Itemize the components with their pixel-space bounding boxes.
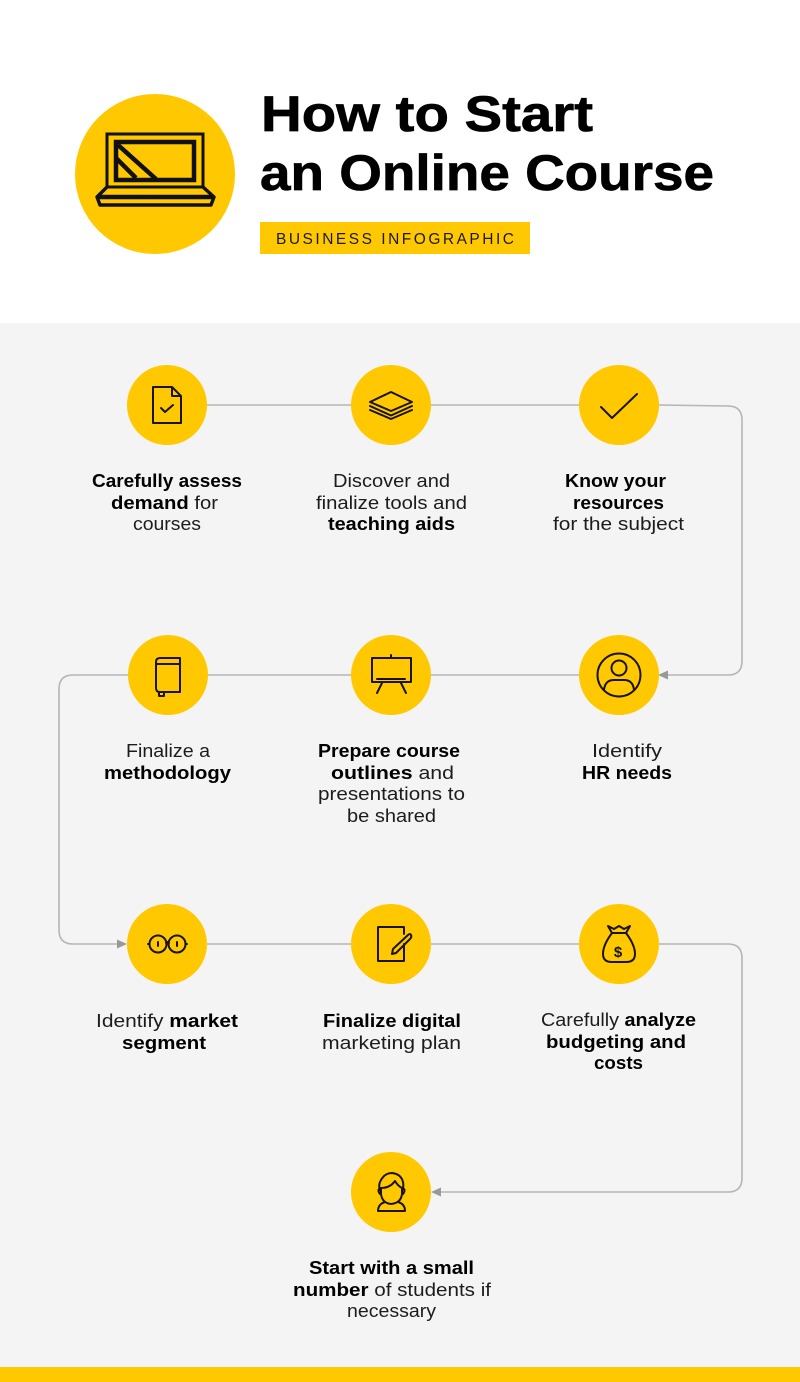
- icon: check mark: [579, 365, 659, 445]
- step 8 text: [322, 1011, 461, 1053]
- icon: book: [128, 635, 208, 715]
- title: [260, 86, 714, 201]
- step 6: HR needs: [579, 635, 672, 783]
- step 3 text: resources: [573, 493, 664, 513]
- step 1: assess demand: [92, 365, 242, 534]
- step 5 text: be shared: [347, 806, 436, 826]
- step 3 text: [553, 471, 684, 534]
- step 9 text: [541, 1010, 696, 1073]
- panel: page background: [0, 323, 800, 1367]
- step 4 text: methodology: [104, 763, 231, 783]
- step 4 text: [104, 741, 231, 783]
- step 10 text: [293, 1258, 492, 1321]
- step 5 text: [318, 741, 465, 826]
- icon: user in circle: [579, 635, 659, 715]
- step 2 text: finalize tools and: [316, 493, 467, 513]
- icon: money bag: [579, 904, 659, 984]
- connector: row 2 to row 3: [59, 675, 579, 948]
- connector: row 3 to row 4: [207, 944, 742, 1196]
- step 1 text: Carefully assess: [92, 471, 242, 491]
- step 9 text: Carefully analyze: [541, 1010, 696, 1030]
- step 1 text: demand for: [111, 493, 218, 513]
- step 10 text: Start with a small: [309, 1258, 474, 1278]
- step 6 text: Identify: [592, 741, 662, 761]
- step 2: tools and aids: [316, 365, 467, 534]
- subtitle tag: [260, 222, 530, 254]
- step 10: start small: [293, 1152, 492, 1321]
- step 7 text: [96, 1011, 238, 1053]
- step 1 text: courses: [133, 514, 201, 534]
- icon: notepad and pen: [351, 904, 431, 984]
- subtitle tag: BUSINESS INFOGRAPHIC: [276, 231, 514, 248]
- step 9 text: costs: [594, 1053, 643, 1073]
- step 9 text: budgeting and: [546, 1032, 686, 1052]
- step 10 text: necessary: [347, 1301, 436, 1321]
- icon: stacked layers: [351, 365, 431, 445]
- step 3 text: Know your: [565, 471, 666, 491]
- footer bar: [0, 1367, 800, 1382]
- icon: document check: [127, 365, 207, 445]
- step 2 text: teaching aids: [328, 514, 455, 534]
- step 9: budgeting and costs: [541, 904, 696, 1073]
- icon: presentation easel: [351, 635, 431, 715]
- header icon: laptop: [75, 94, 235, 254]
- icon: person with headset: [351, 1152, 431, 1232]
- connector: row 1 to row 2: [207, 405, 742, 680]
- title: How to Start: [261, 86, 593, 142]
- step 5 text: presentations to: [318, 784, 465, 804]
- step 6 text: HR needs: [582, 763, 672, 783]
- step 4 text: Finalize a: [126, 741, 211, 761]
- icon: glasses: [127, 904, 207, 984]
- step 7 text: Identify market: [96, 1011, 238, 1031]
- step 5 text: Prepare course: [318, 741, 460, 761]
- step 10 text: number of students if: [293, 1280, 492, 1300]
- step 3 text: for the subject: [553, 514, 684, 534]
- step 2 text: [316, 471, 467, 534]
- step 3: know resources: [553, 365, 684, 534]
- step 8: digital marketing plan: [322, 904, 461, 1053]
- step 5 text: outlines and: [331, 763, 454, 783]
- title: an Online Course: [260, 145, 714, 201]
- step 6 text: [582, 741, 672, 783]
- step 4: methodology: [104, 635, 231, 783]
- step 7: market segment: [96, 904, 238, 1053]
- step 5: course outlines: [318, 635, 465, 826]
- step 1 text: [92, 471, 242, 534]
- step 8 text: Finalize digital: [323, 1011, 461, 1031]
- step 8 text: marketing plan: [322, 1033, 461, 1053]
- step 7 text: segment: [122, 1033, 206, 1053]
- icon: money bag: $: [614, 944, 623, 961]
- step 2 text: Discover and: [333, 471, 450, 491]
